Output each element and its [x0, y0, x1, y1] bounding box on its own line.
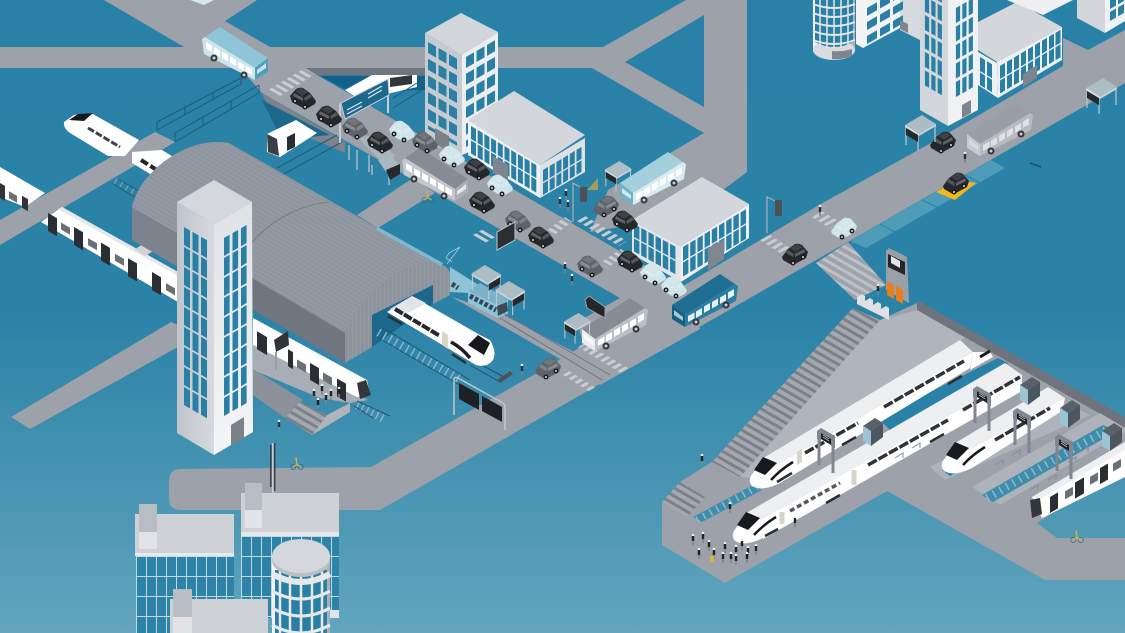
high speed train upper left: [64, 113, 175, 177]
buffer: [497, 371, 513, 383]
railing: [277, 78, 425, 175]
roof: [177, 180, 252, 224]
gable opening: [372, 285, 433, 347]
roof seam: [250, 202, 329, 245]
traffic lights and crowd north of junction: [559, 178, 598, 222]
long stairs: [712, 308, 880, 477]
hs1 tail windows: [980, 351, 990, 357]
tall building door: [435, 128, 449, 153]
tall tower left windows: [927, 0, 940, 97]
bus grey east: [967, 103, 1033, 156]
top: [272, 539, 330, 573]
crosswalk road east 1: [760, 235, 790, 253]
platform sign 2: [973, 386, 991, 431]
platform sign 4: [1055, 434, 1073, 479]
tall tower left face: [920, 0, 948, 126]
right glass: [686, 211, 743, 275]
block behind: [1007, 0, 1073, 15]
glass footbridge: [157, 78, 259, 142]
door: [708, 239, 724, 270]
regional train left, behind station: [0, 167, 178, 304]
crowd: [692, 454, 796, 565]
ticket machines: [857, 294, 889, 320]
landing: [680, 462, 740, 497]
hs2 windshield: [737, 512, 760, 530]
low stairs: [662, 482, 705, 517]
mid block: [856, 0, 920, 48]
train hs3: [942, 387, 1065, 473]
road: tram strip: [452, 297, 612, 382]
shelter near light bus: [605, 161, 631, 192]
tram rear: [450, 267, 497, 306]
billboard lower: [585, 296, 605, 318]
signal head: [580, 187, 587, 202]
window band: [88, 128, 120, 147]
train hs1: [750, 340, 993, 488]
person: [877, 284, 879, 295]
building: bottom left B: [241, 483, 339, 618]
round tower grid columns: [820, 0, 848, 48]
end shelter 1: [863, 418, 883, 446]
train body: [387, 296, 494, 366]
sign post: [275, 352, 277, 370]
platform signs: [817, 428, 835, 473]
tall building left face: [425, 33, 462, 155]
sign panel: [341, 79, 389, 119]
roof: [241, 493, 339, 532]
shelter 1: [472, 265, 501, 299]
tall tower right face: [948, 0, 978, 126]
cars: [290, 88, 969, 380]
platform benches: [895, 443, 1088, 490]
building: bottom left C: [170, 589, 268, 633]
road: avenue junction: [577, 285, 700, 385]
doors and windows: [257, 331, 346, 402]
Y junction inner triangle: [625, 15, 704, 107]
carriage beyond road: [132, 150, 175, 177]
hs1 side: [777, 352, 973, 483]
glass front: [136, 556, 234, 633]
train doors: [1050, 456, 1121, 513]
carriage left of road: [0, 167, 45, 207]
black cars: [290, 88, 969, 273]
pedestrians: [559, 189, 569, 211]
road: top crossing: [104, 0, 270, 47]
road: side link: [357, 178, 435, 228]
round tower grid rows: [813, 4, 855, 44]
low block right face: [540, 138, 585, 198]
tracks: [500, 313, 610, 380]
train front: [267, 134, 279, 156]
buildings top right: [190, 0, 1125, 126]
avenue shelters: [349, 136, 400, 185]
orange door 1: [887, 281, 894, 299]
tall building right face: [462, 32, 498, 155]
glazing: [275, 570, 327, 633]
hs3 windows: [995, 408, 1050, 440]
long carriage: [41, 207, 178, 302]
bus grey avenue: [402, 148, 468, 201]
high speed train leaving hall: [375, 296, 513, 388]
road markings: [268, 68, 1041, 392]
mast: [270, 443, 276, 493]
train windows: [390, 75, 412, 87]
transoms: [136, 556, 234, 633]
gate frame: [886, 248, 909, 303]
coupling: [135, 240, 160, 256]
corner block left face: [1077, 0, 1105, 33]
signal east: [767, 197, 775, 233]
round tower door: [832, 49, 852, 59]
hs1 nose stripe: [771, 462, 793, 480]
tall building left windows: [432, 44, 453, 143]
gantry frame: [454, 377, 505, 430]
low block door: [1023, 65, 1037, 87]
tram and shelters: [446, 247, 610, 380]
hs3 roof: [957, 387, 1065, 450]
low block right face: [997, 27, 1062, 98]
hs1 wheels: [777, 376, 962, 482]
crosswalk junction 2: [577, 216, 627, 246]
pantograph: [446, 247, 460, 264]
left windows: [187, 229, 204, 417]
hs2 nose stripe: [754, 517, 776, 535]
track bed right: [982, 425, 1117, 502]
bus light blue top: [202, 27, 268, 80]
end shelter 4: [1102, 423, 1122, 451]
mid block windows: [872, 0, 898, 41]
right terminal: [662, 242, 1125, 583]
roof: [135, 514, 234, 553]
signal 1: [573, 183, 580, 222]
low building: junction: [632, 177, 749, 282]
roof box: [245, 483, 262, 510]
left face: [177, 202, 214, 455]
glass front: [241, 536, 339, 618]
train body: [1032, 448, 1125, 518]
platform sign 3: [1013, 408, 1031, 453]
platform lighter: [972, 413, 1125, 505]
entrance gate: [857, 248, 909, 320]
train cab: [1030, 498, 1042, 518]
low block right glass: [1002, 31, 1058, 93]
track ties left: [697, 487, 757, 520]
round tower body: [813, 0, 855, 52]
stair wall: [312, 403, 350, 435]
low block right glass: [546, 148, 579, 194]
small dash: [1030, 163, 1041, 167]
hs1 roof: [765, 340, 973, 465]
track fragment upper left: [112, 179, 142, 198]
gable front: [345, 262, 450, 363]
low block left glass: [982, 58, 990, 91]
road: lower left: [11, 322, 178, 429]
hs2 doors: [782, 470, 854, 524]
overpass shadow and recess: [262, 68, 425, 153]
buses: [202, 27, 1033, 351]
tower: front left: [177, 180, 253, 455]
sign label: [891, 256, 900, 268]
corner block windows: [1113, 0, 1121, 22]
tram cab: [497, 302, 508, 316]
rail bed: [375, 328, 506, 388]
hs3 windshield: [946, 442, 969, 460]
low block roof: [978, 2, 1062, 62]
road: horizontal and Y junction: [0, 0, 747, 232]
crosswalk left: [473, 228, 497, 243]
sign text lines: [347, 86, 382, 114]
train nose and carriage: [64, 113, 139, 156]
pedestrians: [521, 152, 966, 375]
crosswalk junction 1: [546, 217, 572, 236]
hs3 side: [969, 398, 1065, 468]
base: [330, 610, 339, 618]
pale cars: [389, 121, 857, 299]
yellow bay: [936, 180, 976, 200]
hs2 roof: [748, 363, 1022, 520]
station hall: [132, 142, 450, 363]
round tower base: [813, 40, 855, 60]
corner block right face: [1105, 0, 1125, 33]
roof box: [139, 504, 157, 532]
crosswalk top: [268, 68, 315, 98]
low block left face: [978, 52, 998, 98]
hs2 side: [760, 375, 1022, 539]
bus dark teal: [672, 274, 738, 327]
track bed left: [693, 485, 762, 522]
crosswalk lower 2: [560, 369, 596, 392]
tinted parking bays: [850, 160, 1005, 248]
track: [354, 401, 390, 420]
roof box: [173, 589, 192, 617]
end shelter 2: [1020, 377, 1040, 405]
mullions: [136, 556, 234, 633]
sign gantry on road: [454, 377, 505, 430]
sign posts: [340, 93, 388, 143]
crosswalk lower 1: [578, 343, 628, 373]
right face: [214, 202, 253, 455]
end shelter 3: [1060, 400, 1080, 428]
roof box front: [245, 510, 262, 528]
train side: [253, 318, 370, 397]
track ties right: [987, 428, 1110, 498]
road: left bridge approach: [0, 132, 175, 245]
luggage yellow: [710, 556, 714, 562]
cyclist on long road: [291, 457, 303, 470]
gate sign: [888, 254, 905, 275]
bus grey lower: [582, 298, 648, 351]
hs3 nose stripe: [963, 447, 985, 465]
hs3 nose: [942, 442, 972, 473]
tram front car: [468, 283, 508, 318]
tall building roof: [425, 13, 498, 55]
platform sign: [274, 331, 289, 352]
low block roof: [468, 91, 585, 165]
road: long diagonal: [169, 30, 1125, 510]
tram windows: [452, 284, 496, 310]
cyclist terminal: [1071, 530, 1083, 543]
bay dividers: [880, 175, 980, 232]
roof: [170, 599, 268, 633]
hs2 nose: [733, 512, 763, 543]
right face: [681, 204, 749, 282]
tram roof strip: [376, 227, 443, 266]
panel 1: [459, 383, 479, 410]
lip: [272, 543, 330, 577]
grey cars: [342, 118, 619, 380]
regional train platform: [253, 318, 390, 435]
upper concourse: [740, 310, 965, 478]
track bed hs3: [942, 470, 960, 476]
east shelter 2: [1086, 78, 1117, 114]
regional train right: [1030, 442, 1125, 518]
signal glow: [587, 178, 598, 190]
round tower glazing: [815, 0, 853, 47]
left face: [632, 220, 681, 282]
left glass: [637, 225, 673, 273]
tall tower door: [962, 100, 971, 118]
lower shelter: [564, 313, 590, 344]
doors and windows: [48, 212, 175, 304]
back gable shade: [132, 207, 178, 267]
cyclist avenue: [422, 191, 434, 202]
platform side: [253, 369, 303, 418]
terminal slab: [662, 303, 1125, 583]
mid block door: [900, 20, 908, 33]
hs1 windshield: [754, 457, 777, 475]
body: [272, 556, 330, 633]
stairs: [285, 402, 327, 435]
hs2 windows: [790, 483, 840, 511]
door: [442, 331, 448, 349]
bus light blue junction: [620, 152, 686, 205]
roof shade: [390, 296, 426, 316]
hs1 door: [797, 449, 802, 465]
tram roof: [468, 283, 510, 305]
building: bottom left A: [135, 504, 234, 633]
tall tower right windows: [958, 0, 971, 97]
shelter 2: [496, 281, 525, 315]
nose stripe: [451, 342, 470, 358]
grid columns: [280, 570, 322, 633]
side wall: [132, 207, 345, 363]
window band: [395, 309, 440, 336]
top building fragment: [190, 0, 214, 5]
roof: [632, 177, 749, 246]
windshield: [468, 335, 490, 355]
middle train under overpass: [267, 75, 425, 175]
door: [231, 417, 244, 446]
carriage windows left: [0, 183, 28, 214]
mid block side: [900, 0, 920, 40]
train body: [267, 120, 317, 157]
platform lighter 2: [930, 400, 1090, 480]
train door: [287, 133, 295, 151]
low building: avenue north: [425, 13, 585, 198]
windshield: [69, 113, 93, 121]
low block left face: [468, 120, 540, 198]
tall building right windows: [470, 43, 491, 145]
barrel roof: [132, 142, 450, 333]
road signs and shelters: [422, 78, 1117, 375]
roof box front: [139, 532, 157, 549]
grid rows: [272, 574, 330, 633]
track bed between trains: [878, 358, 1008, 430]
billboard avenue: [497, 222, 515, 250]
band: [135, 553, 234, 556]
crosswalk road east 2: [810, 210, 840, 228]
hs1 end: [970, 352, 993, 370]
low block left glass: [474, 128, 534, 192]
east shelter 1: [905, 115, 936, 151]
hs1 windows: [805, 361, 964, 453]
cylinder tower bottom: [272, 539, 330, 633]
back wall: [917, 300, 1125, 428]
overhead sign on overpass: [340, 79, 389, 143]
crosswalk junction 3: [600, 249, 628, 268]
mullions: [241, 536, 339, 618]
roof box front: [173, 617, 192, 633]
panel 2: [482, 396, 502, 422]
wheels: [388, 316, 466, 363]
train behind sign: [345, 75, 417, 100]
hs2 windows far: [868, 377, 1020, 465]
hs1 nose: [750, 457, 780, 488]
rear windows: [141, 160, 160, 172]
transoms: [241, 536, 339, 618]
train hs2: [733, 363, 1022, 543]
road: avenue: [240, 68, 690, 340]
train cab: [357, 380, 371, 399]
low block door: [493, 156, 508, 182]
train roof: [1032, 442, 1125, 499]
upper stairs: [816, 242, 886, 300]
platform surface: [253, 345, 368, 403]
hs2 wheels: [765, 434, 944, 536]
passengers: [278, 384, 340, 431]
roof strip: [58, 207, 178, 276]
orange door 2: [896, 286, 903, 304]
signal east head: [775, 200, 782, 216]
right windows: [227, 227, 244, 414]
band: [241, 532, 339, 536]
